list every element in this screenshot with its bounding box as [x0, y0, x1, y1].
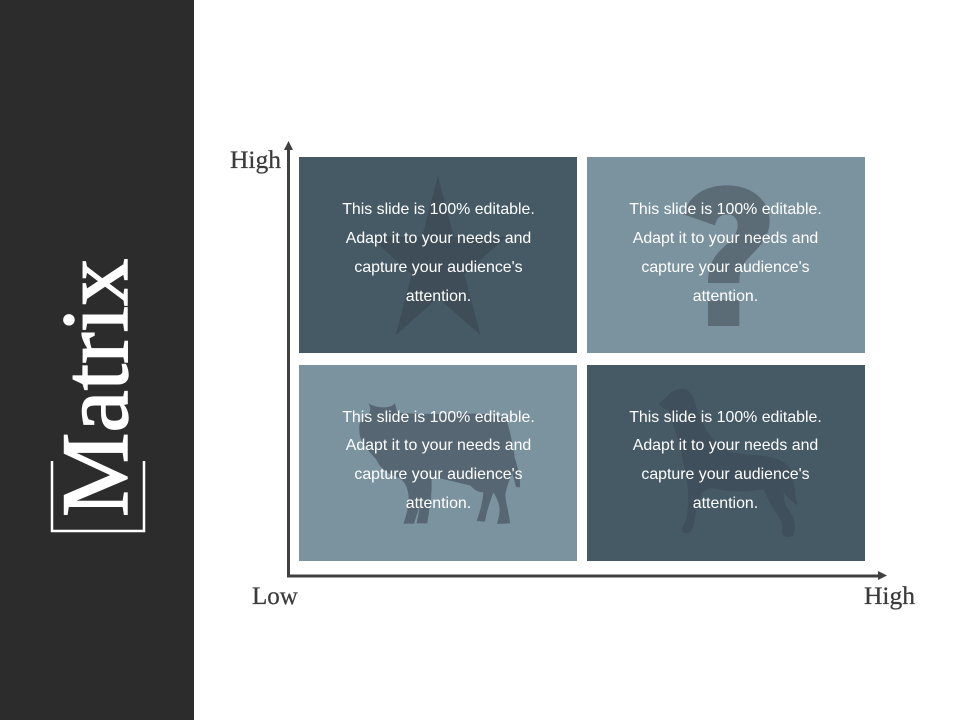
panel: bottom left [299, 365, 577, 561]
text block: This slide is 100% editable. [342, 409, 535, 426]
text block: capture your audience's [641, 466, 810, 483]
panel: bottom right [587, 365, 865, 561]
title bracket [52, 461, 144, 531]
x axis label: Low: Low [252, 583, 298, 610]
icon: cow [359, 403, 520, 524]
text block: attention. [693, 495, 758, 512]
icon: star [369, 176, 507, 335]
icon: question mark [684, 185, 770, 326]
y axis label: High: High [230, 145, 281, 174]
x axis arrow [287, 571, 887, 580]
text block: This slide is 100% editable. [629, 201, 822, 218]
text block: Adapt it to your needs and [633, 230, 818, 247]
text block: attention. [406, 288, 471, 305]
text block: capture your audience's [641, 259, 810, 276]
text block: This slide is 100% editable. [629, 409, 822, 426]
text block: attention. [693, 288, 758, 305]
text block: attention. [406, 495, 471, 512]
text block: Adapt it to your needs and [346, 437, 531, 454]
panel: top right [587, 157, 865, 353]
text block: Adapt it to your needs and [346, 230, 531, 247]
text block: capture your audience's [354, 466, 523, 483]
title: Matrix: Matrix [42, 258, 148, 517]
text block: This slide is 100% editable. [342, 201, 535, 218]
panel: top left [299, 157, 577, 353]
y axis arrow [284, 141, 293, 576]
icon: dog [659, 389, 798, 537]
text block: capture your audience's [354, 259, 523, 276]
text block: Adapt it to your needs and [633, 437, 818, 454]
x axis label: High: High [864, 581, 915, 610]
sidebar panel [0, 0, 194, 720]
